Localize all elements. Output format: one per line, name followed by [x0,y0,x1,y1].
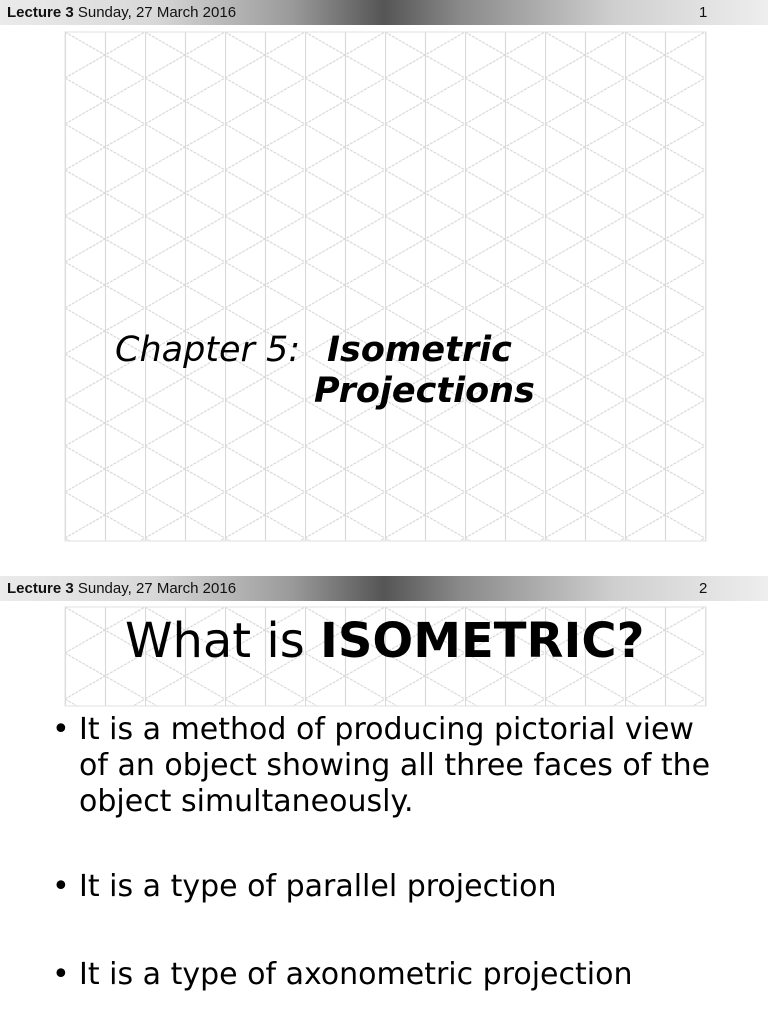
isometric grid strip slide 2 [64,606,706,706]
header bar slide 2: 2 [699,580,707,597]
header bar slide 2 [0,576,768,601]
chapter title: Projections [314,371,535,411]
header bar slide 1: 1 [699,4,707,21]
bullet 1: • [52,712,70,747]
bullet 1 [52,712,710,819]
header bar slide 1 [0,0,768,25]
bullet 3: • [52,957,70,992]
chapter title: Chapter 5: [115,330,300,370]
bullet list [52,712,710,992]
header bar slide 1: Lecture 3 Sunday, 27 March 2016 [7,4,236,21]
bullet 1: of an object showing all three faces of the [79,748,710,783]
bullet 2: It is a type of parallel projection [79,869,557,904]
slide 2 heading: What is ISOMETRIC? [125,613,644,669]
bullet 2: • [52,869,70,904]
bullet 1: It is a method of producing pictorial view [79,712,694,747]
chapter title [115,330,535,411]
bullet 3: It is a type of axonometric projection [79,957,632,992]
bullet 1: object simultaneously. [79,784,413,819]
isometric grid panel slide 1 [64,32,706,542]
header bar slide 2: Lecture 3 Sunday, 27 March 2016 [7,580,236,597]
chapter title: Isometric [327,330,512,370]
